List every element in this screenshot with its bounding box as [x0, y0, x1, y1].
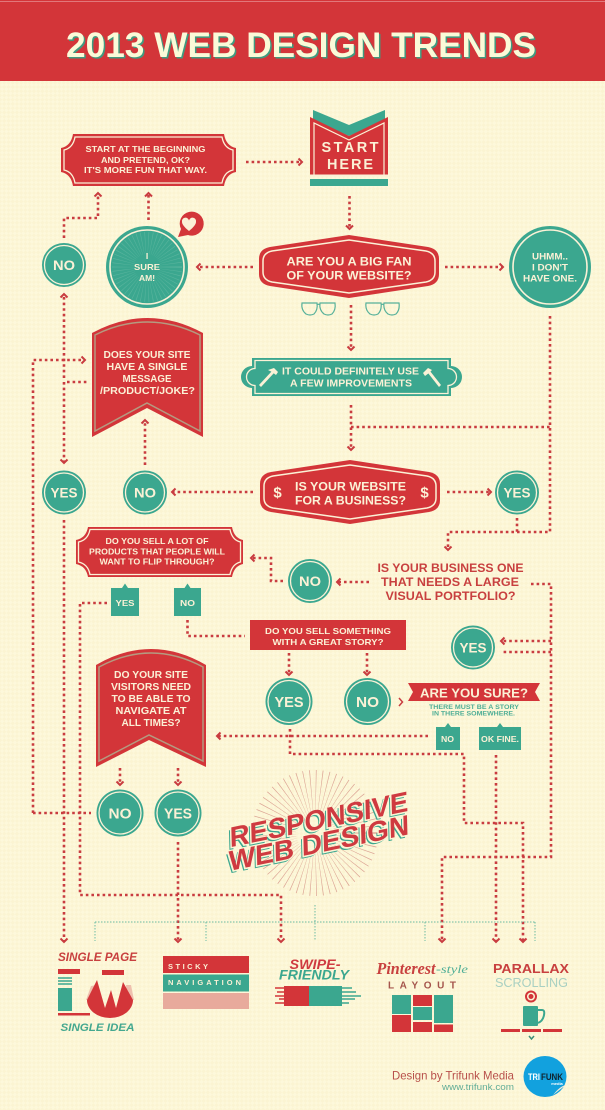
- circle: no: NO: [299, 574, 321, 589]
- ribbon: single message: HAVE A SINGLE: [106, 361, 188, 373]
- tag: yes: [111, 584, 139, 616]
- header band: [0, 0, 605, 81]
- icon: masonry tiles: [392, 995, 453, 1032]
- circle: yes: [451, 626, 495, 670]
- circle: yes navigation: [154, 790, 202, 836]
- title: 2013 WEB DESIGN TRENDS: [68, 28, 538, 66]
- plaque: is your website for a business: $: [273, 484, 282, 502]
- circle: yes: YES: [460, 640, 486, 656]
- plaque: could definitely use improvements: A FEW IMPROVEMENTS: [290, 378, 412, 390]
- icon: glasses left: [302, 303, 335, 315]
- text: visual portfolio question: VISUAL PORTFOLIO?: [386, 589, 516, 603]
- flowchart connectors: [33, 162, 551, 942]
- dashed tree: [95, 905, 535, 941]
- icon: heart bubble: [178, 212, 204, 237]
- trend: sticky navigation: STICKY: [168, 962, 208, 971]
- circle: yes navigation: YES: [164, 806, 192, 822]
- logo: trifunk media: FUNK: [541, 1072, 563, 1083]
- trend: pinterest-style layout: -style: [436, 962, 469, 976]
- text: there must be a story: THERE MUST BE A STORY: [429, 705, 519, 711]
- icon: hammer left: [259, 368, 278, 387]
- tag: yes: YES: [116, 598, 135, 608]
- trend: swipe-friendly: SWIPE-: [290, 957, 341, 972]
- trend: parallax scrolling: PARALLAX: [493, 961, 569, 976]
- plaque: are you a big fan: [259, 235, 439, 298]
- plaque: sell a lot of products: PRODUCTS THAT PEOPLE WILL: [89, 546, 225, 556]
- ribbon: are you sure: ARE YOU SURE?: [420, 686, 528, 700]
- trend: swipe-friendly: FRIENDLY: [279, 968, 351, 982]
- circle: no story: NO: [356, 694, 379, 711]
- headline: responsive web design: WEB DESIGN: [226, 811, 407, 880]
- plaque: is your website for a business: $: [420, 484, 429, 502]
- circle: no navigation: NO: [108, 806, 132, 822]
- tag: no: NO: [441, 735, 454, 744]
- box: sell something with a great story: [250, 620, 406, 650]
- circle: I sure am: [106, 226, 188, 308]
- circle: I sure am: SURE: [134, 262, 160, 272]
- plaque: could definitely use improvements: IT COULD DEFINITELY USE: [282, 366, 419, 378]
- circle: no: [42, 243, 86, 287]
- circle: uhmm I don't have one: [509, 226, 591, 308]
- circle: I sure am: AM!: [139, 273, 155, 283]
- text: visual portfolio question: IS YOUR BUSINESS ONE: [378, 561, 524, 575]
- circle: yes left: YES: [50, 486, 78, 500]
- ribbon: single message: [92, 318, 203, 437]
- plaque: is your website for a business: IS YOUR WEBSITE: [295, 482, 406, 494]
- tag: no: [174, 584, 201, 616]
- banner: start here: HERE: [327, 157, 373, 173]
- banner: start here: [310, 110, 388, 186]
- trend: parallax scrolling: [493, 961, 569, 1039]
- ribbon: navigate at all times: DO YOUR SITE: [114, 669, 188, 681]
- tag: ok fine: OK FINE.: [481, 735, 519, 744]
- circle: uhmm I don't have one: HAVE ONE.: [523, 274, 577, 284]
- trend: parallax scrolling: SCROLLING: [495, 975, 568, 990]
- trend: pinterest-style layout: LAYOUT: [388, 980, 456, 992]
- trend: sticky navigation: [163, 956, 249, 1009]
- box: sell something with a great story: WITH A GREAT STORY?: [272, 637, 384, 647]
- plaque: start at the beginning: IT'S MORE FUN THAT WAY.: [84, 165, 207, 175]
- text: visual portfolio question: THAT NEEDS A LARGE: [381, 575, 519, 589]
- credit: design by trifunk media: Design by Trifunk Media: [392, 1068, 514, 1082]
- ribbon: navigate at all times: [96, 649, 206, 767]
- plaque: sell a lot of products: [76, 527, 243, 577]
- headline: responsive web design: WEB DESIGN: [228, 808, 409, 877]
- trend: pinterest-style layout: Pinterest: [376, 959, 437, 978]
- circle: yes story: YES: [274, 694, 304, 711]
- ribbon: single message: DOES YOUR SITE: [104, 349, 190, 361]
- ribbon: navigate at all times: ALL TIMES?: [122, 717, 180, 729]
- trend: single page single idea: [58, 952, 137, 1034]
- circle: uhmm I don't have one: I DON'T: [532, 262, 569, 272]
- plaque: sell a lot of products: DO YOU SELL A LOT OF: [106, 536, 208, 546]
- text: visual portfolio question: [378, 561, 524, 603]
- circle: no: [123, 470, 167, 514]
- headline: responsive web design: RESPONSIVE: [228, 786, 407, 855]
- headline: responsive web design: RESPONSIVE: [229, 785, 409, 853]
- circle: yes left: [42, 470, 86, 514]
- plaque: is your website for a business: [260, 460, 440, 524]
- logo: trifunk media: TRI: [528, 1072, 540, 1083]
- plaque: is your website for a business: FOR A BUSINESS?: [295, 496, 406, 508]
- icon: mug with heart: [501, 992, 562, 1039]
- plaque: could definitely use improvements: [241, 358, 462, 396]
- tag: no: [436, 723, 460, 750]
- headline: responsive web design: RESPONSIVE: [227, 788, 406, 856]
- circle: yes right: [495, 470, 539, 514]
- ribbon: navigate at all times: NAVIGATE AT: [116, 705, 187, 717]
- plaque: start at the beginning: START AT THE BEGINNING: [86, 144, 206, 154]
- circle: no story: [344, 678, 391, 725]
- icon: page layout with flame: [58, 969, 134, 1018]
- ribbon: single message: MESSAGE: [122, 373, 172, 385]
- tag: ok fine: [479, 723, 521, 750]
- text: there must be a story: [429, 705, 519, 718]
- headline: responsive web design: WEB DESIGN: [227, 810, 408, 879]
- credit: design by trifunk media: [392, 1068, 514, 1092]
- circle: no: [288, 559, 332, 603]
- trend: swipe-friendly: [275, 957, 361, 1006]
- trend: single page single idea: SINGLE PAGE: [58, 952, 137, 964]
- circle: yes story: [266, 678, 312, 725]
- circle: I sure am: I: [146, 251, 148, 261]
- plaque: sell a lot of products: WANT TO FLIP THROUGH?: [100, 556, 214, 566]
- logo: trifunk media: [524, 1056, 566, 1097]
- sunburst behind responsive web design: [274, 792, 356, 874]
- ribbon: navigate at all times: TO BE ABLE TO: [112, 693, 190, 705]
- icon: hammer right: [423, 368, 441, 387]
- circle: yes right: YES: [504, 486, 530, 500]
- icon: swipe streaks: [275, 986, 361, 1006]
- title: 2013 WEB DESIGN TRENDS: [66, 26, 536, 65]
- circle: uhmm I don't have one: UHMM..: [532, 252, 568, 262]
- icon: glasses right: [366, 303, 399, 315]
- banner: start here: START: [322, 140, 379, 156]
- plaque: start at the beginning: AND PRETEND, OK?: [101, 155, 190, 165]
- plaque: are you a big fan: ARE YOU A BIG FAN: [286, 254, 412, 268]
- ribbon: are you sure: [408, 683, 540, 701]
- ribbon: single message: /PRODUCT/JOKE?: [100, 385, 195, 397]
- credit: design by trifunk media: www.trifunk.com: [441, 1082, 514, 1092]
- trend: sticky navigation: NAVIGATION: [168, 978, 241, 987]
- plaque: are you a big fan: OF YOUR WEBSITE?: [286, 268, 412, 282]
- box: sell something with a great story: DO YOU SELL SOMETHING: [265, 626, 391, 636]
- trend: single page single idea: SINGLE IDEA: [60, 1022, 135, 1034]
- circle: no navigation: [96, 790, 144, 836]
- ribbon: navigate at all times: VISITORS NEED: [111, 681, 191, 693]
- tag: no: NO: [180, 598, 195, 608]
- plaque: start at the beginning: [61, 134, 236, 186]
- logo: trifunk media: media: [551, 1081, 564, 1086]
- text: there must be a story: IN THERE SOMEWHERE.: [432, 712, 515, 718]
- circle: no: NO: [134, 486, 156, 500]
- trend: pinterest-style layout: [376, 959, 469, 1032]
- circle: no: NO: [53, 258, 75, 273]
